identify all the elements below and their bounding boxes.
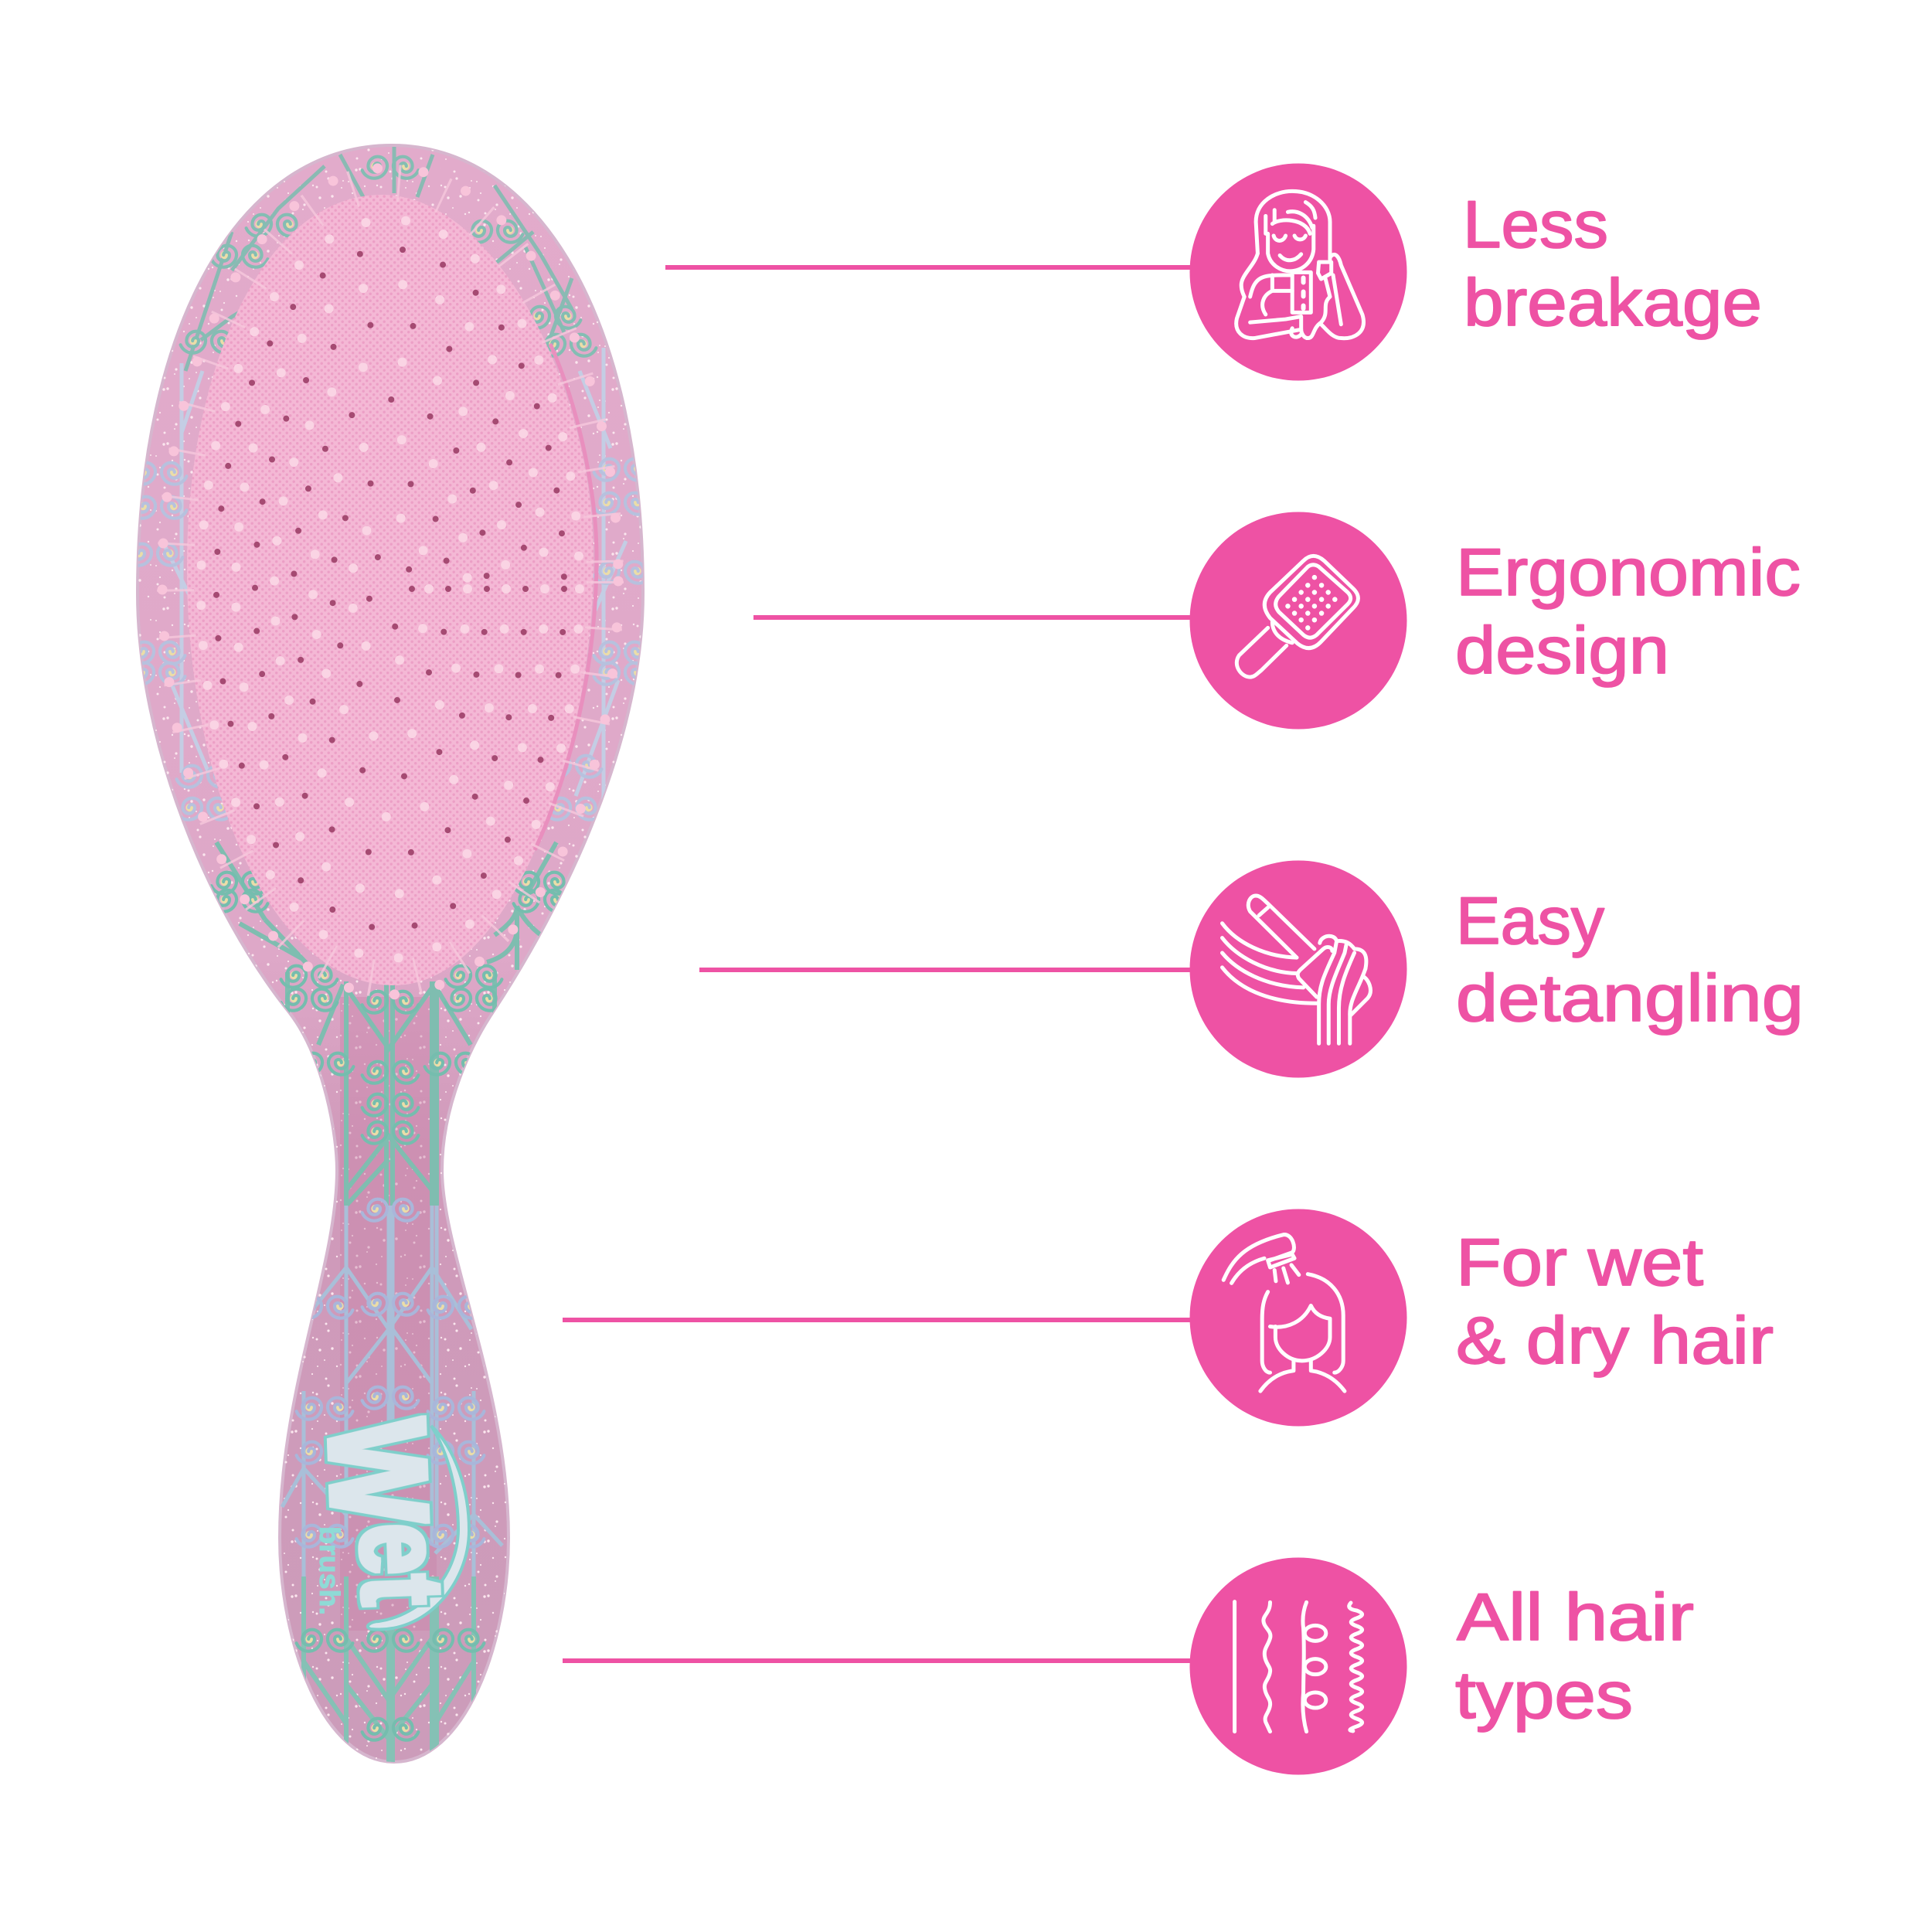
label: Easy detangling: detangling (1456, 961, 1804, 1036)
label: Less breakage (1463, 188, 1762, 340)
holographic ironwork pattern (138, 147, 643, 1762)
connector lines (563, 267, 1194, 1661)
Wet Brush logo: W (298, 1416, 458, 1526)
label: Less breakage: breakage (1464, 266, 1762, 340)
feature: all hair types (1190, 1558, 1694, 1774)
icon: paddle brush (1190, 512, 1406, 730)
label: Easy detangling: Easy (1456, 884, 1604, 958)
Wet Brush logo: et (336, 1521, 468, 1607)
label: All hair types: types (1455, 1658, 1633, 1733)
Wet Brush logo: brush. (314, 1526, 345, 1615)
Wet Brush logo (298, 1416, 469, 1630)
brush body (138, 145, 643, 1762)
icon: shower over woman (1190, 1209, 1406, 1427)
feature: less breakage (1190, 164, 1762, 380)
feature: ergonomic design (1190, 512, 1801, 730)
feature: easy detangling (1190, 861, 1804, 1077)
feature: for wet and dry hair (1190, 1209, 1774, 1427)
label: For wet & dry hair: & dry hair (1456, 1304, 1774, 1378)
label: All hair types (1455, 1580, 1694, 1733)
icon: woman with comb (1190, 164, 1406, 380)
label: For wet & dry hair: For wet (1456, 1226, 1703, 1300)
product: detangling hair brush (127, 139, 673, 1798)
label: All hair types: All hair (1457, 1580, 1694, 1655)
icon: four hair textures (1190, 1558, 1406, 1774)
label: For wet & dry hair (1456, 1226, 1774, 1378)
cushion pad (187, 195, 597, 985)
icon: comb through hair (1190, 861, 1406, 1077)
label: Easy detangling (1456, 884, 1804, 1036)
label: Ergonomic design: Ergonomic (1456, 536, 1801, 610)
outer bristles (162, 168, 618, 995)
label: Ergonomic design: design (1455, 614, 1669, 688)
label: Less breakage: Less (1463, 188, 1608, 262)
label: Ergonomic design (1455, 536, 1801, 688)
